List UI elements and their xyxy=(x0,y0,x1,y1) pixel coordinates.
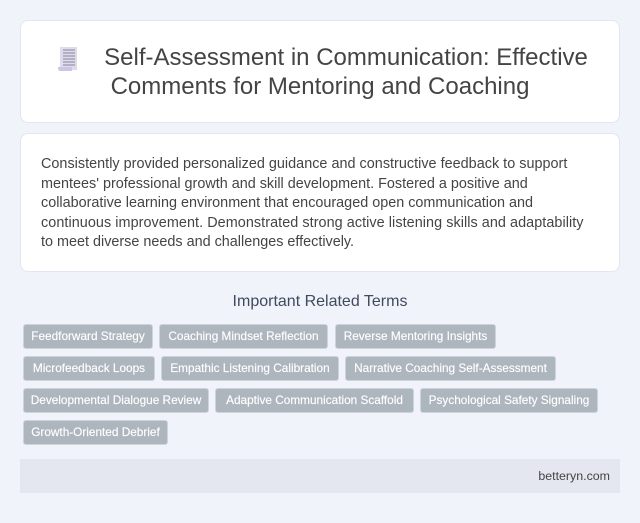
chip xyxy=(23,388,209,413)
summary text: continuous improvement. Demonstrated strong active listening skills and adaptability xyxy=(41,215,584,231)
chip xyxy=(161,356,339,381)
chip xyxy=(420,388,598,413)
chip: Microfeedback Loops xyxy=(33,361,145,375)
chip: Adaptive Communication Scaffold xyxy=(226,393,403,407)
summary text xyxy=(41,156,584,250)
footer bar xyxy=(20,459,620,493)
chip xyxy=(335,324,496,349)
summary text: mentees' professional growth and skill development. Fostered a positive and xyxy=(41,176,528,192)
chip: Psychological Safety Signaling xyxy=(429,393,589,407)
panel: title card xyxy=(20,20,620,123)
title: Comments for Mentoring and Coaching xyxy=(111,73,529,100)
title xyxy=(104,44,588,100)
chip: Empathic Listening Calibration xyxy=(170,361,330,375)
chip: Reverse Mentoring Insights xyxy=(344,329,487,343)
chip xyxy=(215,388,414,413)
summary text: Consistently provided personalized guidance and constructive feedback to support xyxy=(41,156,567,172)
icon: document scroll xyxy=(58,47,77,71)
chip xyxy=(23,420,168,445)
chip: Narrative Coaching Self-Assessment xyxy=(354,361,547,375)
heading: important related terms: Important Related Terms xyxy=(233,293,407,310)
summary text: to meet diverse needs and challenges effectively. xyxy=(41,234,354,250)
chip xyxy=(159,324,328,349)
chip xyxy=(345,356,556,381)
panel: summary text card xyxy=(20,133,620,272)
footer text: betteryn.com xyxy=(538,469,610,483)
title: Self-Assessment in Communication: Effective xyxy=(104,44,588,71)
chip: Coaching Mindset Reflection xyxy=(168,329,319,343)
chip: Growth-Oriented Debrief xyxy=(31,425,160,439)
chip xyxy=(23,356,155,381)
chip: Feedforward Strategy xyxy=(31,329,145,343)
term chips xyxy=(23,324,598,445)
chip: Developmental Dialogue Review xyxy=(31,393,201,407)
chip xyxy=(23,324,153,349)
summary text: collaborative learning environment that encouraged open communication and xyxy=(41,195,533,211)
